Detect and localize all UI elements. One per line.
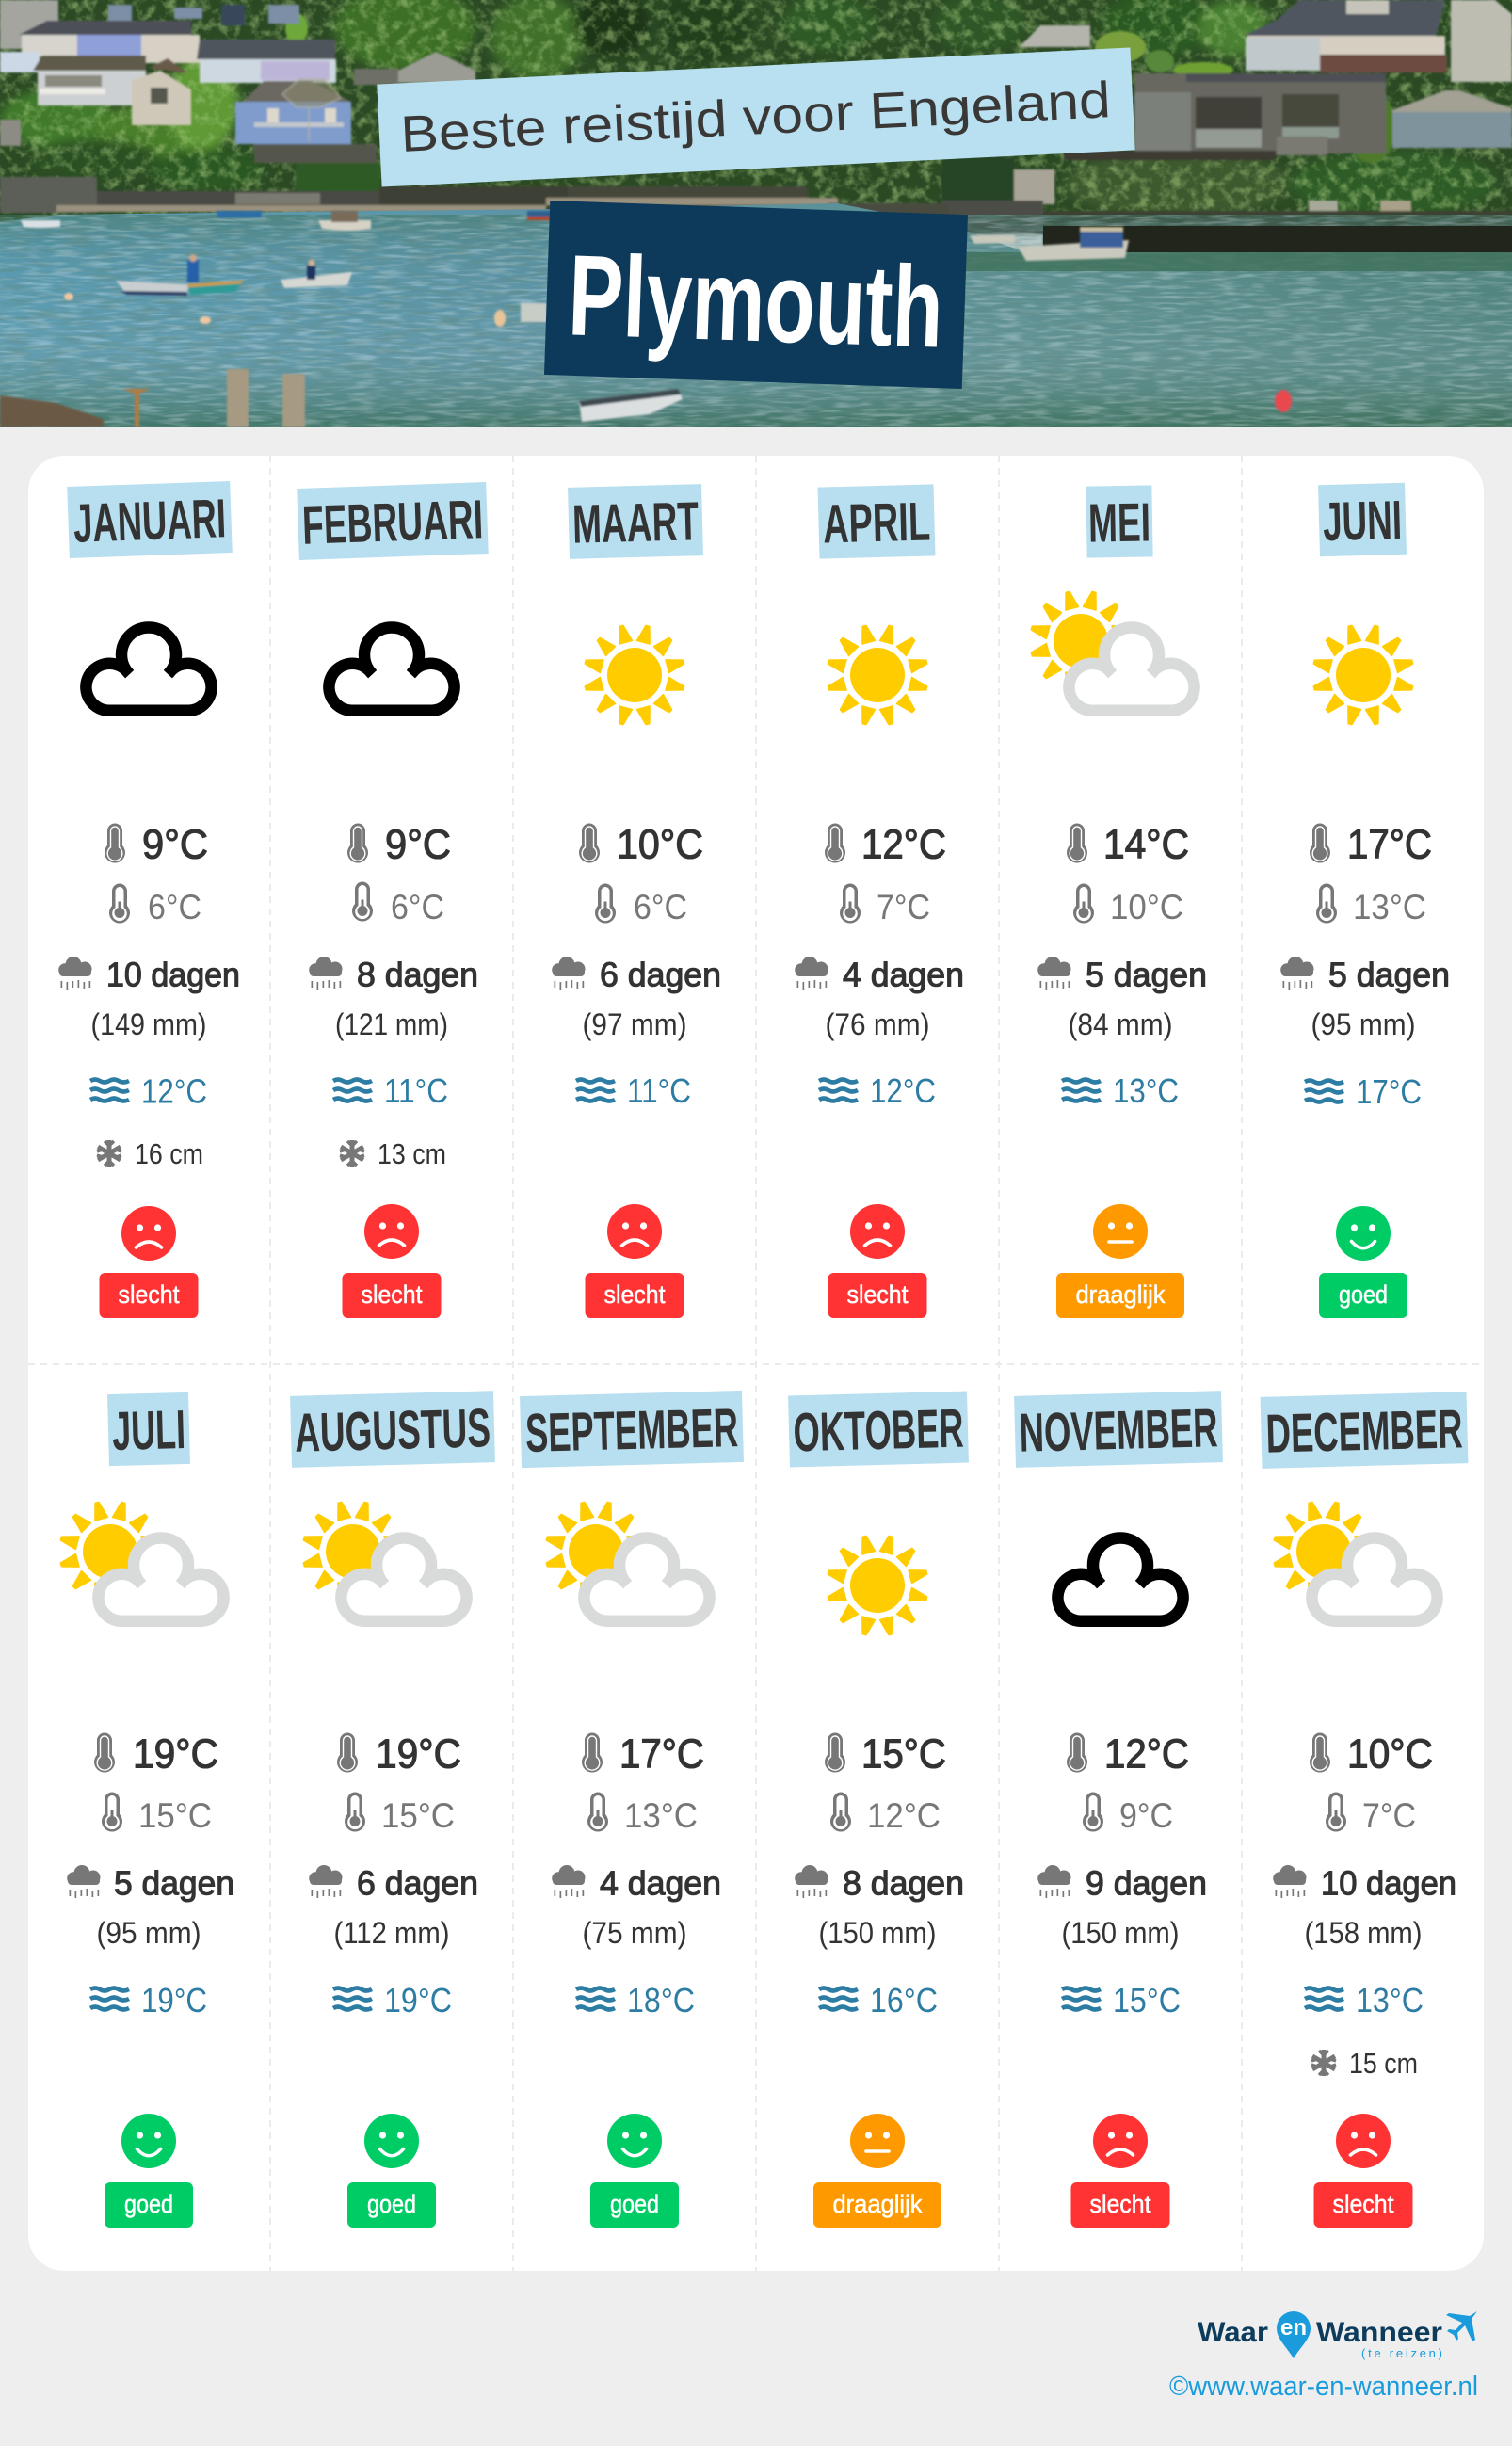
maximum temperature: 17°C (1347, 822, 1432, 868)
rating (813, 2114, 941, 2228)
rainfall: (158 mm) (1305, 1916, 1422, 1950)
sea temperature (333, 1981, 452, 2020)
rating (1071, 2114, 1169, 2228)
maximum temperature: 10°C (617, 822, 703, 868)
maximum temperature (94, 1731, 218, 1778)
sea temperature (576, 1071, 691, 1110)
sea temperature (90, 1981, 207, 2020)
sea temperature: 11°C (384, 1071, 448, 1110)
minimum temperature (102, 1793, 212, 1835)
month heading (290, 1391, 495, 1468)
sea temperature: 12°C (141, 1071, 207, 1111)
rainfall: (95 mm) (1311, 1007, 1416, 1041)
rating (590, 2114, 679, 2228)
snow (97, 1137, 203, 1170)
sea temperature: 12°C (870, 1071, 936, 1110)
column: juli (59, 1392, 234, 2228)
rating: slecht (847, 1280, 909, 1309)
rain days: 5 dagen (1328, 955, 1450, 994)
rain days: 10 dagen (106, 955, 240, 994)
logo: Waar en Wanneer: en (1280, 2315, 1307, 2341)
icon: sun behind cloud (1030, 590, 1195, 711)
minimum temperature: 7°C (877, 888, 930, 926)
maximum temperature (1310, 1731, 1433, 1778)
rainfall: (112 mm) (333, 1916, 450, 1950)
month heading: JANUARI (72, 488, 227, 555)
rating: draaglijk (832, 2190, 923, 2218)
column: februari (297, 482, 489, 1318)
sea temperature (1305, 1072, 1422, 1111)
month heading: NOVEMBER (1019, 1397, 1218, 1464)
maximum temperature (582, 1731, 704, 1778)
column: november (1014, 1391, 1223, 2228)
rating (1319, 1206, 1407, 1318)
minimum temperature (595, 883, 687, 926)
snow: 15 cm (1349, 2047, 1418, 2080)
sea temperature (333, 1071, 448, 1110)
minimum temperature: 13°C (624, 1796, 698, 1835)
rating (343, 1204, 441, 1318)
maximum temperature (825, 822, 946, 868)
rating (1314, 2114, 1412, 2228)
rain days: 8 dagen (843, 1864, 964, 1902)
rainfall: (75 mm) (582, 1916, 687, 1950)
minimum temperature (1326, 1793, 1416, 1835)
rating (828, 1204, 926, 1318)
logo: Waar en Wanneer: Wanneer (1316, 2317, 1442, 2348)
sea temperature: 11°C (627, 1071, 691, 1110)
minimum temperature: 6°C (148, 888, 201, 926)
maximum temperature: 12°C (861, 822, 946, 868)
rating (100, 1206, 198, 1318)
rain days: 6 dagen (600, 955, 721, 994)
sea temperature (90, 1071, 207, 1111)
maximum temperature (337, 1731, 461, 1778)
column: juni (1280, 483, 1450, 1318)
column: augustus (290, 1391, 495, 2228)
sea temperature: 17°C (1356, 1072, 1422, 1111)
month heading: AUGUSTUS (294, 1397, 491, 1464)
minimum temperature (1083, 1793, 1173, 1835)
minimum temperature: 12°C (867, 1796, 941, 1835)
sea temperature (576, 1981, 695, 2020)
maximum temperature (825, 1731, 946, 1778)
rating: slecht (362, 1280, 423, 1309)
snow: 16 cm (135, 1137, 203, 1170)
minimum temperature: 15°C (381, 1796, 455, 1835)
icon: sun (827, 1535, 928, 1636)
rainfall: (95 mm) (96, 1916, 201, 1950)
minimum temperature: 13°C (1353, 888, 1426, 926)
icon: sun behind cloud (59, 1501, 224, 1621)
snow (340, 1137, 446, 1170)
minimum temperature: 15°C (138, 1796, 212, 1835)
snow: 13 cm (378, 1137, 446, 1170)
rating (586, 1204, 684, 1318)
sea temperature (819, 1071, 936, 1110)
maximum temperature: 19°C (376, 1731, 461, 1778)
maximum temperature: 9°C (142, 822, 208, 868)
column: april (795, 484, 964, 1318)
rating (105, 2114, 193, 2228)
rating: draaglijk (1075, 1280, 1166, 1309)
rain days: 8 dagen (357, 955, 478, 994)
minimum temperature: 10°C (1110, 888, 1183, 926)
sea temperature: 19°C (384, 1981, 452, 2020)
rating: slecht (119, 1280, 180, 1309)
icon: sun (1312, 624, 1414, 726)
minimum temperature (1073, 883, 1183, 926)
minimum temperature: 6°C (391, 888, 444, 926)
rainfall: (76 mm) (825, 1007, 930, 1041)
maximum temperature: 10°C (1347, 1731, 1433, 1778)
icon: sun (584, 624, 685, 726)
month heading (1086, 485, 1153, 558)
minimum temperature: 7°C (1362, 1796, 1416, 1835)
month heading (818, 484, 935, 559)
month heading: JULI (111, 1399, 186, 1462)
maximum temperature (579, 822, 703, 868)
month heading (67, 481, 233, 558)
rating: goed (124, 2190, 173, 2218)
maximum temperature: 14°C (1103, 822, 1189, 868)
month heading (1014, 1391, 1223, 1468)
column: januari (58, 481, 240, 1318)
houses left (0, 0, 58, 49)
rating: goed (1339, 1280, 1388, 1309)
icon: cloud (1057, 1537, 1183, 1621)
minimum temperature (345, 1793, 455, 1835)
rainfall: (150 mm) (1062, 1916, 1179, 1950)
column: september (520, 1391, 744, 2228)
snow (1311, 2047, 1418, 2080)
rain days: 10 dagen (1321, 1864, 1456, 1902)
rainfall: (121 mm) (335, 1007, 448, 1041)
rainfall: (150 mm) (819, 1916, 936, 1950)
maximum temperature: 15°C (861, 1731, 946, 1778)
month heading (788, 1392, 969, 1467)
sea temperature (819, 1981, 938, 2020)
rain days: 4 dagen (600, 1864, 721, 1902)
maximum temperature: 19°C (133, 1731, 218, 1778)
minimum temperature (109, 883, 201, 926)
shore left (0, 177, 97, 213)
icon: cloud (86, 627, 212, 711)
month heading: SEPTEMBER (524, 1397, 739, 1464)
rating (1056, 1204, 1184, 1318)
maximum temperature (1067, 822, 1189, 868)
logo: Waar en Wanneer: (te reizen) (1361, 2346, 1442, 2360)
icon: sun behind cloud (302, 1501, 467, 1621)
title banner: Plymouth: Plymouth (567, 231, 945, 372)
rating: slecht (604, 1280, 666, 1309)
rainfall: (97 mm) (582, 1007, 687, 1041)
minimum temperature (352, 881, 444, 926)
maximum temperature (1067, 1731, 1189, 1778)
icon: sun (827, 624, 928, 726)
sea temperature (1062, 1071, 1179, 1110)
minimum temperature (587, 1793, 698, 1835)
month heading (520, 1391, 744, 1468)
sea temperature: 13°C (1113, 1071, 1179, 1110)
water (0, 203, 1512, 427)
icon: cloud (329, 627, 455, 711)
rating: slecht (1333, 2190, 1394, 2218)
column: oktober (788, 1392, 969, 2228)
rainfall: (84 mm) (1068, 1007, 1173, 1041)
month heading: FEBRUARI (301, 489, 484, 556)
rain days: 5 dagen (114, 1864, 234, 1902)
maximum temperature: 17°C (619, 1731, 704, 1778)
minimum temperature: 9°C (1119, 1796, 1173, 1835)
icon: sun behind cloud (1273, 1501, 1438, 1621)
heading banner: Beste reistijd voor Engeland (377, 48, 1135, 186)
month heading: APRIL (822, 491, 931, 555)
logo: Waar en Wanneer: Waar (1198, 2317, 1268, 2348)
month heading: MAART (571, 491, 700, 555)
boats (0, 211, 1292, 427)
rain days: 4 dagen (843, 955, 964, 994)
header photo: harbour with houses and boats (0, 0, 1512, 427)
column: maart (552, 484, 721, 1318)
rain days: 6 dagen (357, 1864, 478, 1902)
column: mei (1030, 485, 1207, 1318)
rain days: 5 dagen (1086, 955, 1207, 994)
maximum temperature (105, 822, 208, 868)
month heading: MEI (1087, 491, 1151, 555)
rating: goed (367, 2190, 416, 2218)
panel: monthly climate table (28, 456, 1484, 2271)
month heading (107, 1392, 190, 1466)
maximum temperature: 9°C (385, 822, 451, 868)
sea temperature: 13°C (1356, 1981, 1424, 2020)
heading banner: Beste reistijd voor Engeland: Beste reistijd voor Engeland (399, 72, 1112, 163)
rain days: 9 dagen (1086, 1864, 1207, 1902)
website credit: ©www.waar-en-wanneer.nl (1169, 2372, 1478, 2402)
month heading (568, 484, 703, 559)
maximum temperature: 12°C (1104, 1731, 1189, 1778)
minimum temperature (1316, 883, 1426, 926)
logo: Waar en Wanneer (1198, 2311, 1477, 2360)
maximum temperature (347, 822, 451, 868)
month heading (1318, 483, 1407, 556)
rating (347, 2114, 436, 2228)
sea temperature: 15°C (1113, 1981, 1181, 2020)
rating: goed (610, 2190, 659, 2218)
minimum temperature (840, 883, 930, 926)
column: december (1261, 1392, 1468, 2228)
houses right (1244, 0, 1445, 36)
rainfall: (149 mm) (90, 1007, 207, 1041)
sea temperature: 18°C (627, 1981, 695, 2020)
sea temperature: 19°C (141, 1981, 207, 2020)
maximum temperature (1310, 822, 1432, 868)
sea temperature (1305, 1981, 1424, 2020)
sea temperature (1062, 1981, 1181, 2020)
rating: slecht (1090, 2190, 1151, 2218)
minimum temperature: 6°C (634, 888, 687, 926)
month heading: JUNI (1322, 490, 1403, 553)
month heading: OKTOBER (793, 1398, 964, 1463)
icon: sun behind cloud (545, 1501, 710, 1621)
sea temperature: 16°C (870, 1981, 938, 2020)
minimum temperature (830, 1793, 941, 1835)
month heading (297, 482, 489, 560)
title banner: Plymouth (544, 201, 968, 389)
